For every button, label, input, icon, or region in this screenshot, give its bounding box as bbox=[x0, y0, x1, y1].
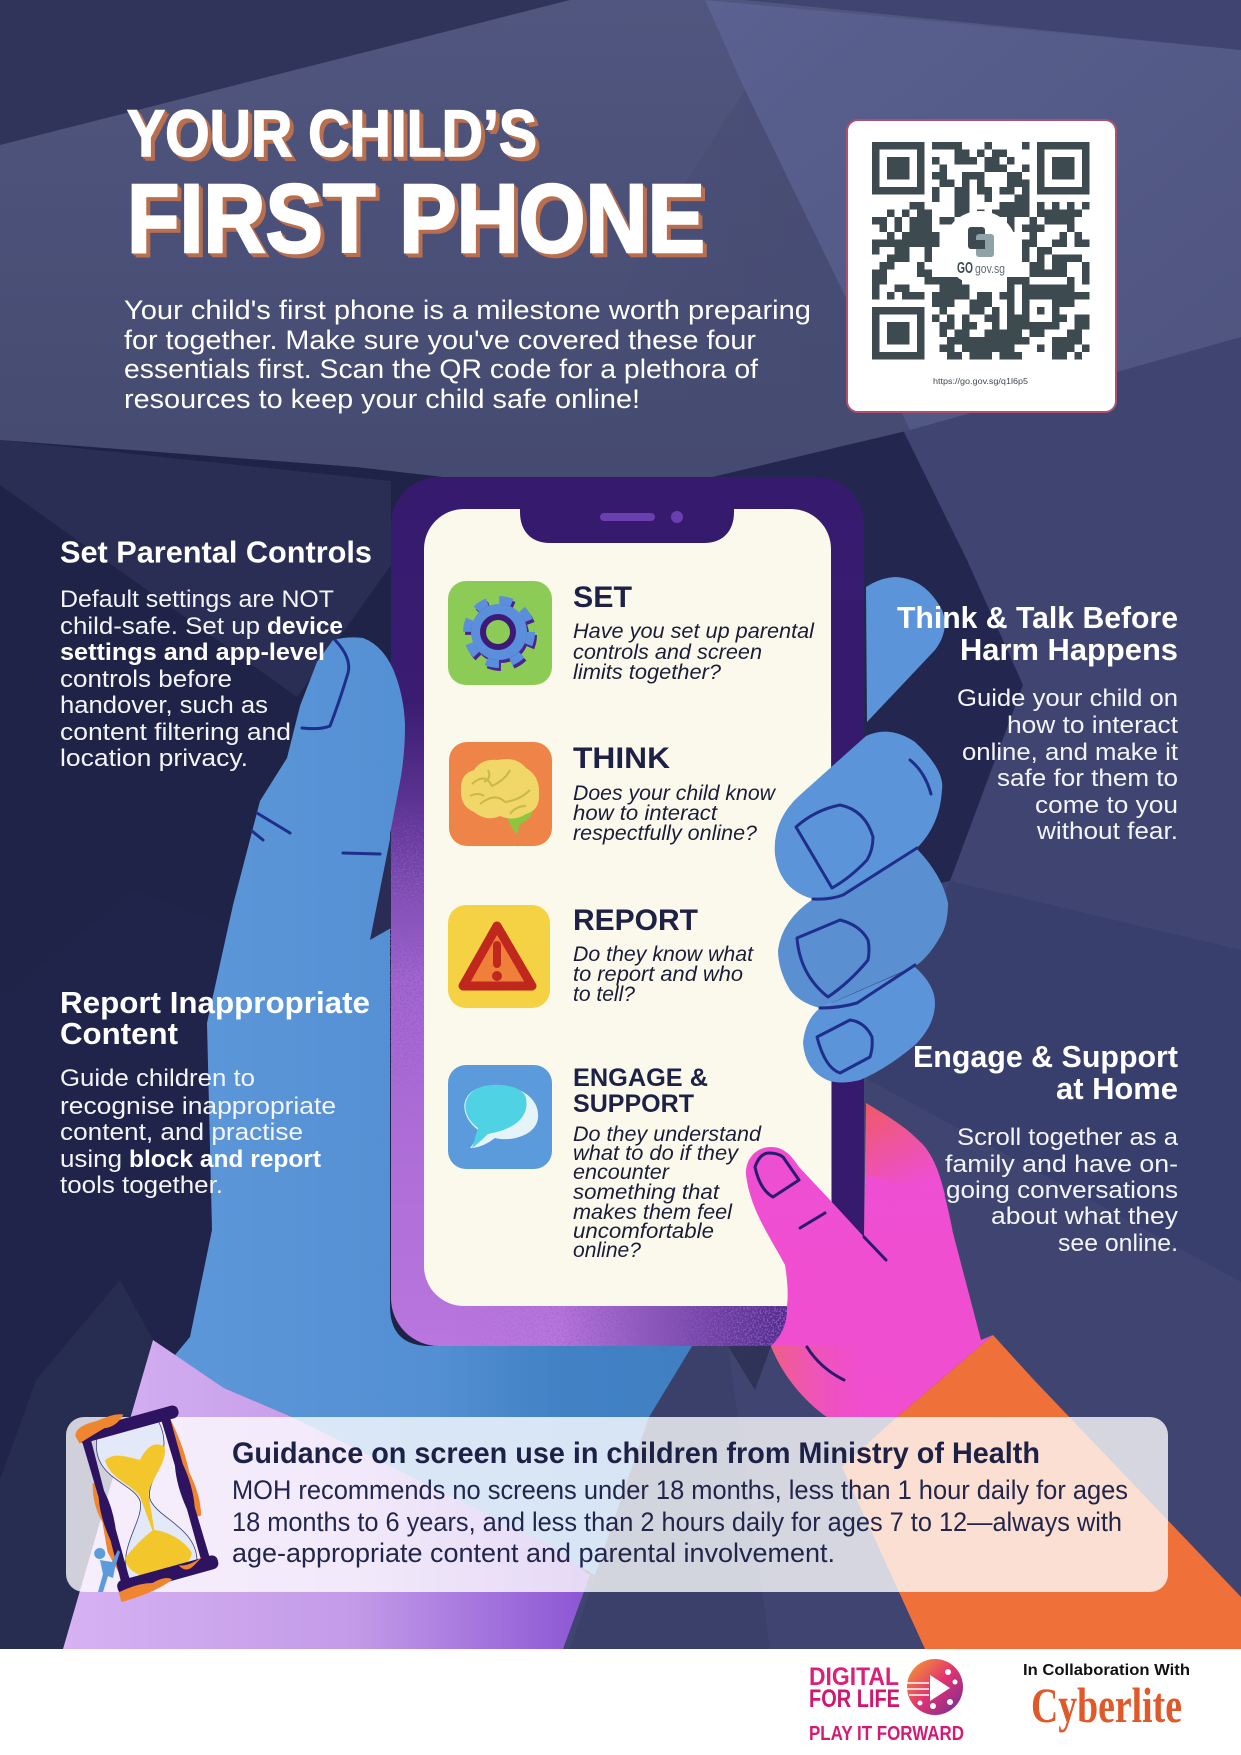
right panel: engage and support: at Home bbox=[1056, 1071, 1178, 1106]
right panel: think and talk: how to interact bbox=[1007, 712, 1178, 739]
icon: gear bbox=[448, 581, 552, 685]
icon: speech bubble bbox=[448, 1065, 552, 1169]
right panel: think and talk: Think & Talk Before bbox=[897, 600, 1178, 635]
phone item: engage and support: online? bbox=[573, 1238, 641, 1262]
phone item: think: Does your child know bbox=[573, 781, 776, 805]
phone item: think: THINK bbox=[573, 742, 670, 775]
intro text: resources to keep your child safe online! bbox=[124, 384, 640, 414]
collaboration label: In Collaboration With bbox=[1023, 1662, 1190, 1679]
left panel: set parental controls: Set Parental Controls bbox=[60, 534, 372, 570]
logo: digital for life: DIGITAL bbox=[809, 1663, 899, 1691]
logo: digital for life bbox=[809, 1659, 964, 1745]
right hand: pink thumb and palm bbox=[746, 1103, 993, 1417]
phone item: think: respectfully online? bbox=[573, 821, 757, 845]
logo: cyberlite: Cyberlite bbox=[1031, 1677, 1182, 1733]
left panel: set parental controls: content filtering and bbox=[60, 719, 291, 746]
right panel: think and talk: without fear. bbox=[1036, 818, 1178, 845]
GO.gov.sg logo: GO bbox=[957, 260, 973, 277]
guidance body: MOH recommends no screens under 18 months, less than 1 hour daily for ages bbox=[232, 1475, 1128, 1505]
right panel: think and talk: online, and make it bbox=[962, 739, 1178, 766]
right panel: engage and support: Scroll together as a bbox=[957, 1124, 1179, 1151]
right panel: think and talk: Harm Happens bbox=[960, 632, 1178, 667]
intro text: for together. Make sure you've covered these four bbox=[124, 325, 756, 355]
phone item: report: Do they know what bbox=[573, 942, 754, 966]
left panel: set parental controls: device bbox=[267, 613, 343, 640]
left panel: report inappropriate content: recognise inappropriate bbox=[60, 1093, 336, 1120]
left panel: set parental controls: Default settings are NOT bbox=[60, 586, 334, 613]
left panel: set parental controls: controls before bbox=[60, 666, 232, 693]
right panel: think and talk: come to you bbox=[1035, 792, 1178, 819]
right hand: orange sleeve bbox=[842, 1335, 1241, 1649]
left panel: report inappropriate content: Report Inappropriate bbox=[60, 985, 370, 1020]
intro text: Your child's first phone is a milestone worth preparing bbox=[124, 295, 811, 325]
right panel: engage and support bbox=[913, 1039, 1179, 1257]
phone item: engage and support: what to do if they bbox=[573, 1141, 739, 1165]
logo: digital for life: FOR LIFE bbox=[809, 1685, 900, 1713]
phone item: engage and support: SUPPORT bbox=[573, 1090, 694, 1118]
left panel: report inappropriate content: content, and practise bbox=[60, 1119, 303, 1146]
phone item: engage and support: something that bbox=[573, 1180, 720, 1204]
panel: screen use guidance bbox=[66, 1417, 1168, 1592]
GO.gov.sg logo: gov.sg bbox=[975, 261, 1005, 276]
phone item: think bbox=[449, 742, 776, 846]
guidance body: age-appropriate content and parental involvement. bbox=[232, 1538, 835, 1568]
phone item: engage and support: encounter bbox=[573, 1160, 670, 1184]
guidance body bbox=[232, 1475, 1128, 1568]
right panel: think and talk: safe for them to bbox=[997, 765, 1178, 792]
left panel: set parental controls: child-safe. Set up bbox=[60, 613, 260, 640]
phone item: report: REPORT bbox=[573, 904, 698, 937]
phone item: report bbox=[448, 904, 754, 1008]
QR code card bbox=[847, 120, 1116, 412]
left panel: report inappropriate content: Guide children to bbox=[60, 1065, 255, 1092]
left panel: set parental controls: settings and app-level bbox=[60, 639, 325, 666]
title bbox=[127, 96, 705, 273]
logo: digital for life: PLAY IT FORWARD bbox=[809, 1723, 964, 1745]
left panel: set parental controls: handover, such as bbox=[60, 692, 268, 719]
title: FIRST PHONE bbox=[127, 164, 705, 273]
left panel: set parental controls bbox=[60, 534, 372, 772]
phone item: set: limits together? bbox=[573, 660, 721, 684]
phone item: set: SET bbox=[573, 581, 632, 614]
left panel: report inappropriate content: block and report bbox=[129, 1146, 321, 1173]
left panel: report inappropriate content: tools together. bbox=[60, 1172, 223, 1199]
QR code matrix bbox=[872, 146, 1090, 356]
phone item: engage and support: Do they understand bbox=[573, 1122, 762, 1146]
guidance heading: Guidance on screen use in children from Ministry of Health bbox=[232, 1437, 1040, 1470]
phone item: engage and support: ENGAGE & bbox=[573, 1064, 708, 1092]
left hand: blue bbox=[175, 637, 692, 1575]
phone item: set: controls and screen bbox=[573, 640, 762, 664]
intro text: essentials first. Scan the QR code for a plethora of bbox=[124, 354, 759, 384]
phone item: engage and support bbox=[448, 1064, 762, 1262]
right panel: engage and support: about what they bbox=[991, 1203, 1178, 1230]
right hand: blue fingers bbox=[775, 577, 948, 1082]
phone item: engage and support: uncomfortable bbox=[573, 1219, 714, 1243]
phone item: report: to tell? bbox=[573, 982, 635, 1006]
phone body bbox=[390, 477, 864, 1346]
footer bbox=[0, 1649, 1241, 1755]
phone item: set: Have you set up parental bbox=[573, 619, 815, 643]
icon: brain bbox=[449, 742, 552, 846]
QR url: https://go.gov.sg/q1l6p5 bbox=[933, 376, 1028, 386]
intro text bbox=[124, 295, 811, 414]
icon: hourglass with climber bbox=[73, 1398, 224, 1602]
left panel: report inappropriate content: using bbox=[60, 1146, 122, 1173]
right panel: think and talk bbox=[897, 600, 1178, 845]
right panel: engage and support: Engage & Support bbox=[913, 1039, 1178, 1074]
sleeve: lilac bbox=[63, 1340, 590, 1649]
phone item: set bbox=[448, 581, 815, 685]
phone item: think: how to interact bbox=[573, 801, 718, 825]
title: YOUR CHILD’S bbox=[127, 96, 537, 170]
illustration: phone held by hands bbox=[63, 477, 1241, 1649]
guidance body: 18 months to 6 years, and less than 2 hours daily for ages 7 to 12—always with bbox=[232, 1507, 1122, 1537]
GO.gov.sg logo bbox=[943, 211, 1017, 285]
left panel: report inappropriate content bbox=[60, 985, 370, 1199]
right panel: think and talk: Guide your child on bbox=[957, 685, 1178, 712]
right panel: engage and support: family and have on- bbox=[945, 1151, 1178, 1178]
phone item: report: to report and who bbox=[573, 962, 743, 986]
left panel: report inappropriate content: Content bbox=[60, 1016, 178, 1051]
right panel: engage and support: see online. bbox=[1058, 1230, 1178, 1257]
icon: warning triangle bbox=[448, 905, 550, 1008]
right panel: engage and support: going conversations bbox=[946, 1177, 1178, 1204]
left panel: set parental controls: location privacy. bbox=[60, 745, 248, 772]
phone item: engage and support: makes them feel bbox=[573, 1200, 733, 1224]
